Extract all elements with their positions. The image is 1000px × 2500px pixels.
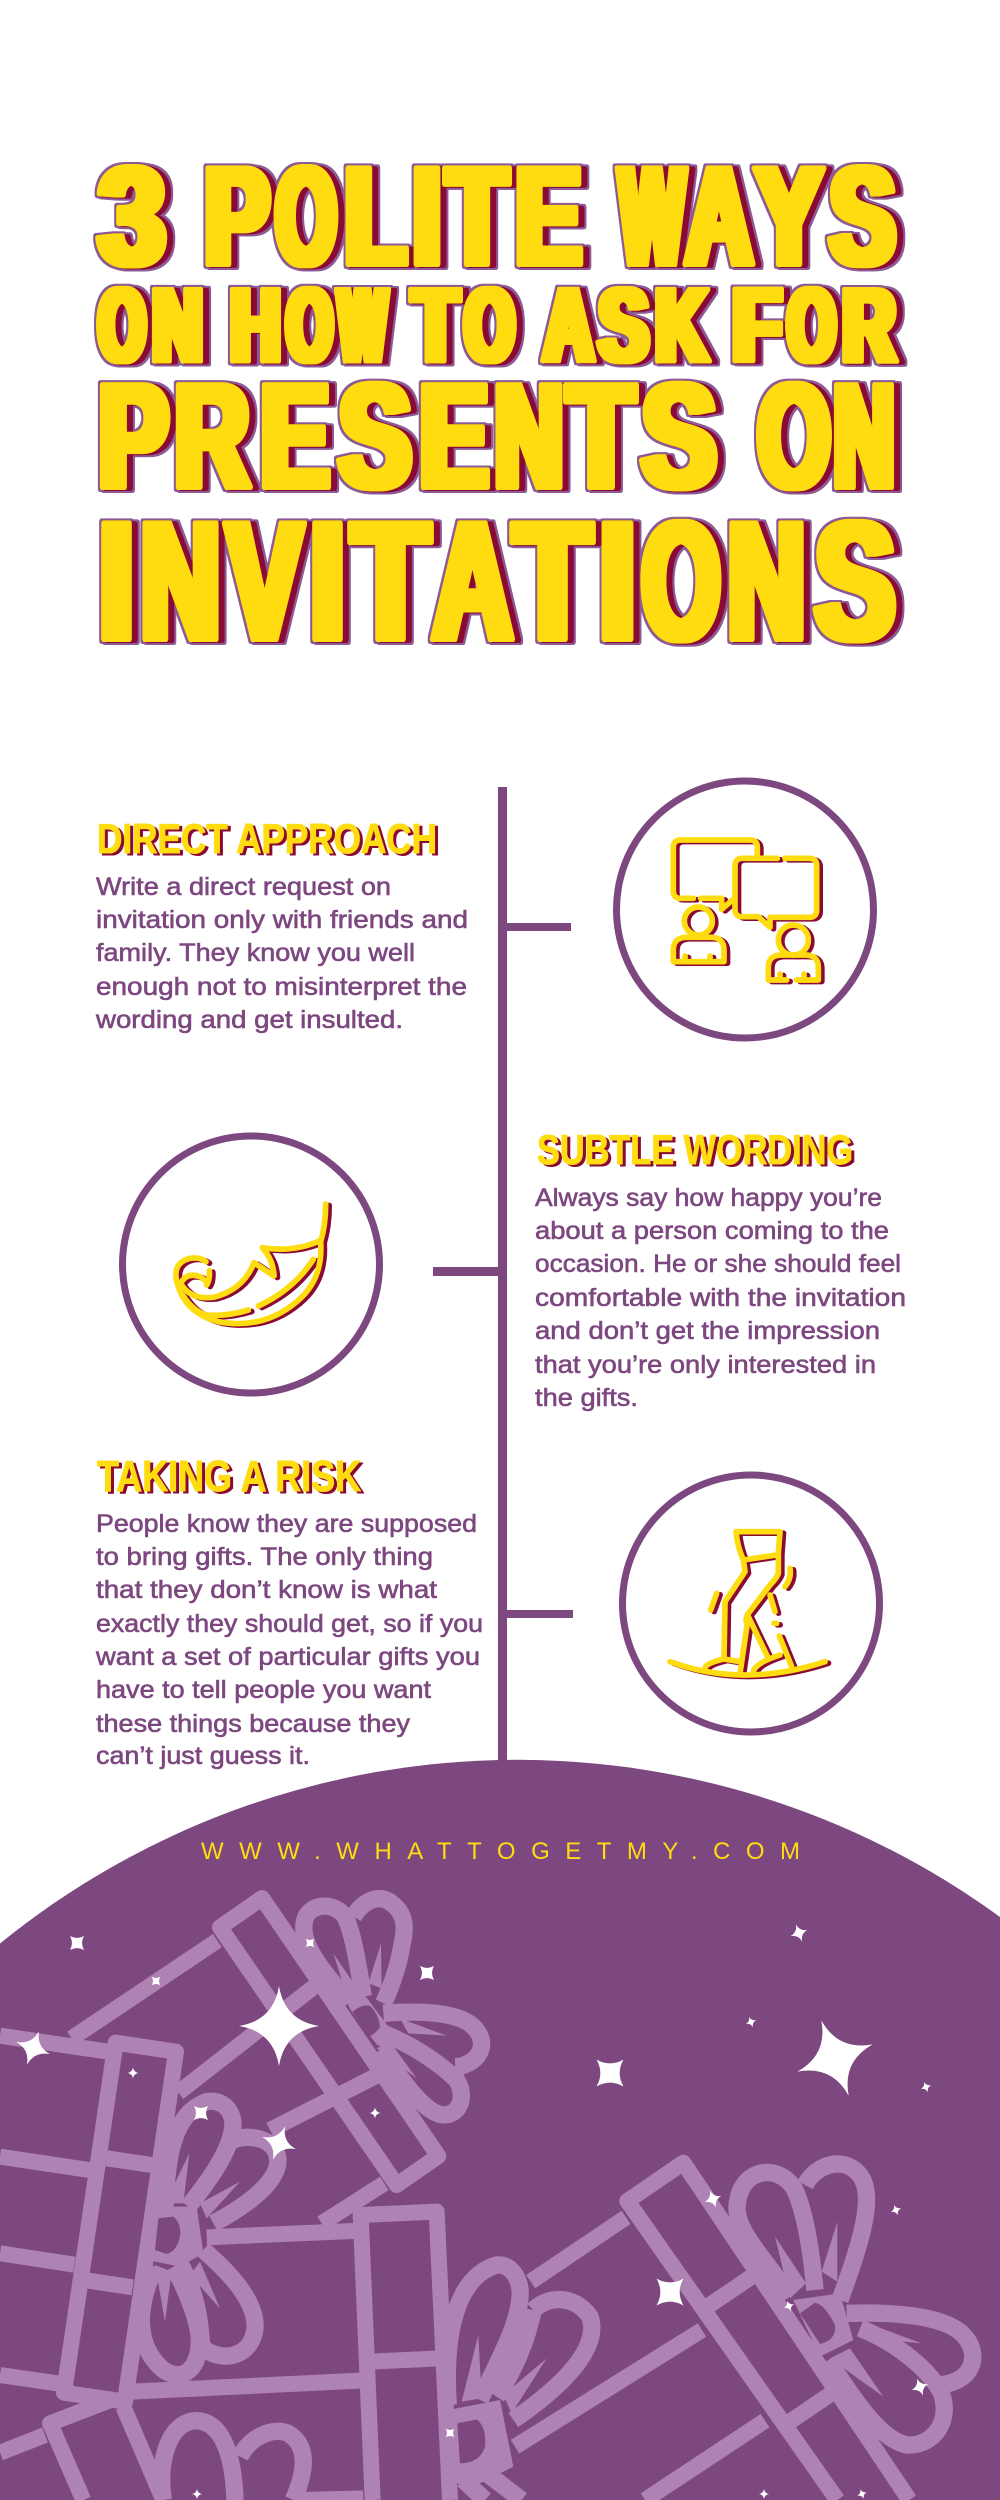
title: S	[815, 487, 895, 675]
body text: taking a risk: have to tell people you want	[96, 1676, 431, 1704]
title: O	[276, 139, 336, 294]
gift illustrations	[0, 1898, 973, 2500]
title: T	[568, 354, 634, 519]
panel: direct approach	[95, 815, 468, 1034]
title: W	[339, 268, 386, 384]
title: A	[433, 487, 512, 675]
panel: taking a risk	[95, 1452, 483, 1770]
title: F	[733, 268, 781, 384]
panel: subtle wording	[535, 1126, 906, 1412]
title: A	[544, 268, 593, 384]
title: N	[153, 268, 202, 384]
body text: subtle wording: that you’re only interested in	[535, 1351, 876, 1379]
title: N	[495, 354, 563, 519]
title: T	[413, 268, 458, 384]
title: N	[728, 487, 805, 675]
title: I	[599, 487, 636, 675]
body text: taking a risk	[95, 1510, 483, 1770]
heading: subtle wording: SUBTLE WORDING	[537, 1126, 853, 1173]
body text: direct approach: enough not to misinterpret the	[96, 973, 467, 1001]
title: O	[642, 487, 720, 675]
title: S	[642, 354, 716, 519]
footer: purple arch	[0, 1760, 1000, 2500]
body text: taking a risk: these things because they	[96, 1710, 411, 1738]
title: S	[339, 354, 411, 519]
title: E	[261, 354, 329, 519]
timeline: vertical line with branches	[433, 787, 573, 1772]
body text: direct approach: family. They know you well	[96, 939, 415, 967]
body text: taking a risk: that they don’t know is what	[96, 1576, 437, 1604]
title: Y	[756, 139, 822, 294]
title: P	[99, 354, 168, 519]
title: A	[686, 139, 752, 294]
gift: right	[515, 2163, 973, 2500]
body text: subtle wording: the gifts.	[535, 1384, 638, 1412]
body text: subtle wording: and don’t get the impression	[535, 1317, 880, 1345]
body text: direct approach	[95, 873, 468, 1034]
title: E	[420, 354, 488, 519]
gift: left	[0, 2036, 278, 2402]
body text: direct approach: wording and get insulted.	[95, 1006, 403, 1034]
title: S	[599, 268, 648, 384]
body text: subtle wording: Always say how happy you’re	[535, 1184, 882, 1212]
gift: centre	[132, 2212, 592, 2500]
body text: taking a risk: want a set of particular gifts you	[95, 1643, 480, 1671]
title: T	[447, 139, 507, 294]
title: N	[834, 354, 894, 519]
body text: taking a risk: People know they are supposed	[96, 1510, 477, 1538]
icon: conversation in circle	[616, 781, 874, 1038]
title: W	[620, 139, 684, 294]
title: K	[656, 268, 707, 384]
gift: top centre	[72, 1898, 482, 2223]
title: L	[345, 139, 406, 294]
body text: subtle wording	[535, 1184, 906, 1412]
title: R	[843, 268, 895, 384]
title: O	[99, 268, 145, 384]
body text: direct approach: Write a direct request on	[96, 873, 391, 901]
title	[99, 139, 895, 675]
body text: direct approach: invitation only with friends and	[96, 906, 468, 934]
body text: subtle wording: comfortable with the invitation	[535, 1284, 906, 1312]
icon: feather in circle	[122, 1136, 380, 1393]
title: H	[231, 268, 280, 384]
body text: taking a risk: to bring gifts. The only thing	[96, 1543, 433, 1571]
title: T	[352, 487, 429, 675]
title: I	[99, 487, 134, 675]
title: N	[141, 487, 220, 675]
title: O	[465, 268, 514, 384]
body text: taking a risk: exactly they should get, so if you	[96, 1610, 483, 1638]
gift: bottom left	[0, 2398, 303, 2500]
title: 3	[99, 139, 165, 294]
heading: direct approach: DIRECT APPROACH	[97, 815, 437, 862]
body text: subtle wording: about a person coming to the	[535, 1217, 889, 1245]
title: E	[516, 139, 581, 294]
title: S	[830, 139, 895, 294]
heading: taking a risk: TAKING A RISK	[97, 1452, 361, 1501]
title: I	[413, 139, 441, 294]
icon: rocking figure in circle	[622, 1475, 880, 1732]
title: O	[758, 354, 830, 519]
title: R	[175, 354, 249, 519]
body text: taking a risk: can’t just guess it.	[96, 1742, 310, 1770]
title: P	[205, 139, 269, 294]
title: I	[310, 487, 345, 675]
title: V	[227, 487, 302, 675]
title: O	[788, 268, 835, 384]
body text: subtle wording: occasion. He or she should feel	[535, 1250, 901, 1278]
title: O	[287, 268, 332, 384]
website url: WWW.WHATTOGETMY.COM	[201, 1838, 800, 1865]
title: T	[514, 487, 591, 675]
stars and sparkles	[10, 1921, 933, 2500]
